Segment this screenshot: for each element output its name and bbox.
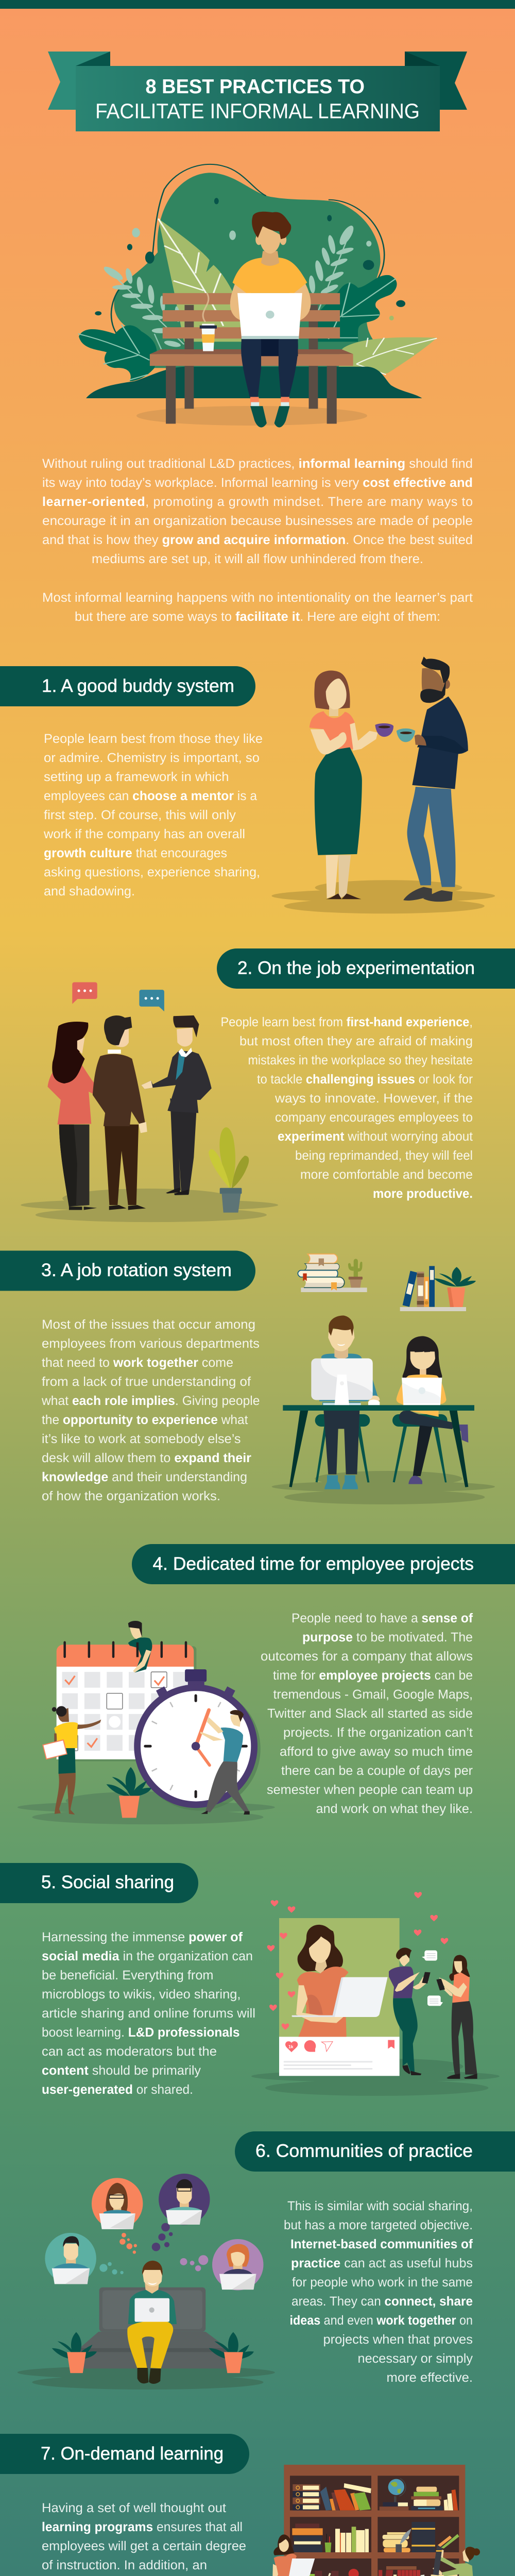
section 7 text: of instruction. In addition, an — [42, 2558, 207, 2572]
calendar — [57, 1642, 196, 1761]
section 4 text — [261, 1611, 473, 1816]
section 2 text: to tackle challenging issues or look for — [257, 1072, 473, 1087]
intro text: its way into today’s workplace. Informal learning is very cost effective and — [42, 476, 473, 490]
section 3 heading — [0, 1251, 255, 1291]
books: shelf row 2 — [292, 2522, 435, 2552]
intro text — [42, 456, 473, 624]
title text: FACILITATE INFORMAL LEARNING — [95, 99, 420, 123]
section 5 text: Harnessing the immense power of — [42, 1930, 243, 1944]
connection dots — [99, 2223, 208, 2275]
illustration: two colleagues with coffee — [271, 657, 495, 913]
intro text: but there are some ways to facilitate it. Here are eight of them: — [75, 609, 440, 624]
section 5 heading — [0, 1863, 198, 1903]
section 3 text: the opportunity to experience what — [42, 1413, 248, 1427]
intro text: learner-oriented, promoting a growth mindset. There are many ways to — [42, 495, 473, 509]
section 1 text — [43, 732, 263, 899]
section 1 heading — [0, 666, 255, 706]
section 1 text: growth culture that encourages — [44, 846, 227, 860]
section 7 text — [41, 2501, 254, 2576]
section 5 heading: 5. Social sharing — [41, 1872, 174, 1892]
section 7 text: employees will get a certain degree — [42, 2539, 246, 2553]
section 1 heading: 1. A good buddy system — [42, 676, 234, 696]
section 4 heading — [132, 1544, 515, 1584]
section 3 text: what each role implies. Giving people — [41, 1394, 260, 1408]
illustration: two people at a desk with shelves — [272, 1254, 495, 1504]
section 6 text: necessary or simply — [357, 2351, 473, 2366]
section 6 heading: 6. Communities of practice — [255, 2141, 473, 2161]
section 4 heading: 4. Dedicated time for employee projects — [152, 1554, 474, 1574]
section 1 text: and shadowing. — [44, 884, 135, 899]
woman with laptop in post — [291, 1925, 388, 2037]
section 3 text: knowledge and their understanding — [42, 1470, 247, 1484]
section 4 text: there can be a couple of days per — [281, 1764, 473, 1778]
section 2 text: more comfortable and become — [300, 1167, 473, 1182]
speech bubble: blue — [139, 990, 164, 1011]
section 5 text: can act as moderators but the — [42, 2044, 217, 2059]
section 6 text: practice can act as useful hubs — [291, 2256, 473, 2270]
section 3 text: employees from various departments — [42, 1336, 260, 1351]
section 1 text: first step. Of course, this will only — [44, 808, 236, 822]
bookshelf — [284, 2465, 465, 2576]
section 2 text: company encourages employees to — [275, 1110, 473, 1125]
section 6 text: more effective. — [386, 2370, 473, 2385]
section 6 text: but has a more targeted objective. — [284, 2218, 473, 2232]
section 3 text: Most of the issues that occur among — [42, 1317, 255, 1332]
section 4 text: People need to have a sense of — [291, 1611, 473, 1625]
section 2 text: being reprimanded, they will feel — [295, 1148, 473, 1163]
section 5 text — [42, 1930, 255, 2097]
woman — [47, 1022, 107, 1210]
section 5 text: content should be primarily — [42, 2063, 201, 2078]
section 1 text: work if the company has an overall — [43, 827, 245, 841]
intro text: encourage it in an organization because businesses are made of people — [42, 514, 473, 528]
section 2 text — [220, 1015, 473, 1201]
post card — [279, 1918, 400, 2076]
man peeking over calendar — [128, 1621, 152, 1672]
post card: 1k — [288, 2044, 294, 2049]
section 2 text: more productive. — [373, 1187, 473, 1201]
section 6 text: for people who work in the same — [292, 2275, 473, 2290]
section 4 text: and work on what they like. — [316, 1802, 473, 1816]
section 2 text: but most often they are afraid of making — [239, 1034, 473, 1048]
section 4 text: outcomes for a company that allows — [261, 1649, 473, 1664]
shelf with books and cactus — [298, 1254, 367, 1292]
avatar: man teal — [45, 2233, 96, 2284]
section 4 text: afford to give away so much time — [280, 1744, 473, 1759]
woman with clipboard — [43, 1706, 101, 1815]
section 2 heading: 2. On the job experimentation — [237, 958, 475, 978]
section 3 text: from a lack of true understanding of — [42, 1375, 251, 1389]
section 6 text — [284, 2199, 473, 2385]
section 1 text: employees can choose a mentor is a — [44, 789, 257, 803]
hero illustration: person on bench with foliage — [78, 164, 437, 428]
top band — [0, 0, 515, 9]
intro text: Most informal learning happens with no intentionality on the learner’s part — [42, 590, 473, 605]
shelf with binders and plant — [400, 1266, 476, 1311]
section 4 text: tremendous - Gmail, Google Maps, — [273, 1687, 473, 1702]
crossed legs — [399, 1411, 468, 1484]
woman with laptop — [271, 2534, 315, 2576]
intro text: mediums are set up, it will all flow unhindered from there. — [92, 552, 423, 566]
section 3 heading: 3. A job rotation system — [41, 1260, 232, 1280]
woman with laptop — [397, 1336, 447, 1417]
chairs — [315, 1414, 448, 1482]
intro text: and that is how they grow and acquire information. Once the best suited — [42, 533, 473, 547]
central person on laptop — [127, 2261, 177, 2384]
floating hearts — [267, 1892, 448, 2030]
illustration: social media post and people — [251, 1892, 500, 2096]
stopwatch — [134, 1669, 261, 1810]
man in brown suit — [93, 1015, 147, 1210]
plants — [52, 2332, 254, 2373]
speech bubbles — [422, 1951, 443, 2006]
section 1 text: or admire. Chemistry is important, so — [44, 751, 260, 765]
speech bubble: red — [72, 982, 97, 1004]
sofa — [79, 2287, 228, 2368]
section 5 text: boost learning. L&D professionals — [42, 2025, 240, 2040]
section 5 text: microblogs to wikis, video sharing, — [42, 1987, 241, 2002]
section 6 heading — [235, 2131, 515, 2172]
section 7 text: learning programs ensures that all — [42, 2520, 243, 2534]
books: shelf row 3 — [295, 2566, 458, 2576]
man with phone — [389, 1947, 431, 2075]
section 2 text: People learn best from first-hand experience, — [220, 1015, 473, 1029]
section 2 text: ways to innovate. However, if the — [274, 1091, 473, 1106]
section 6 text: projects when that proves — [323, 2332, 473, 2347]
man pushing clock hand — [200, 1710, 250, 1815]
section 4 text: time for employee projects can be — [273, 1668, 473, 1683]
section 2 text: experiment without worrying about — [278, 1129, 473, 1144]
desk — [283, 1405, 474, 1487]
section 4 text: purpose to be motivated. The — [302, 1630, 473, 1645]
section 4 text: semester when people can team up — [267, 1783, 473, 1797]
man in dark suit — [141, 1015, 212, 1195]
potted plant — [107, 1767, 151, 1818]
section 7 heading — [0, 2434, 249, 2474]
section 3 text — [41, 1317, 260, 1503]
section 7 text: Having a set of well thought out — [42, 2501, 226, 2515]
section 3 text: of how the organization works. — [42, 1489, 220, 1503]
illustration: three coworkers talking — [21, 982, 278, 1222]
title text — [95, 76, 420, 123]
intro text: Without ruling out traditional L&D practices, informal learning should find — [42, 456, 473, 471]
section 4 text: projects. If the organization can’t — [283, 1725, 473, 1740]
section 1 text: setting up a framework in which — [44, 770, 229, 784]
section 3 text: desk will allow them to expand their — [42, 1451, 251, 1465]
section 2 heading — [217, 948, 515, 989]
section 5 text: be beneficial. Everything from — [42, 1968, 213, 1982]
hero ground shadow — [136, 406, 367, 426]
section 6 text: ideas and even work together on — [289, 2313, 473, 2328]
avatar: woman purple — [212, 2239, 264, 2290]
section 5 text: article sharing and online forums will — [42, 2006, 255, 2021]
potted plant — [209, 1127, 249, 1213]
section 6 text: areas. They can connect, share — [291, 2294, 473, 2309]
section 1 text: asking questions, experience sharing, — [44, 865, 260, 879]
section 3 text: it’s like to work at somebody else’s — [42, 1432, 241, 1446]
illustration: calendar and stopwatch — [18, 1621, 275, 1824]
section 4 text: Twitter and Slack all started as side — [267, 1706, 473, 1721]
section 2 text: mistakes in the workplace so they hesitate — [248, 1053, 473, 1067]
woman with phone — [436, 1955, 477, 2079]
avatar: woman with glasses — [92, 2178, 143, 2229]
section 6 text: This is similar with social sharing, — [287, 2199, 473, 2213]
section 5 text: social media in the organization can — [42, 1949, 253, 1963]
section 1 text: People learn best from those they like — [44, 732, 263, 746]
books: shelf row 1 — [293, 2479, 458, 2511]
man at desktop computer — [311, 1315, 380, 1489]
section 7 heading: 7. On-demand learning — [41, 2444, 224, 2464]
section 5 text: user-generated or shared. — [42, 2082, 193, 2097]
section 6 text: Internet-based communities of — [290, 2237, 473, 2251]
section 3 text: that need to work together come — [42, 1355, 233, 1370]
illustration: community of remote learners — [18, 2174, 275, 2389]
title text: 8 BEST PRACTICES TO — [145, 76, 365, 98]
illustration: bookshelf with readers — [254, 2465, 512, 2576]
avatar: man with glasses — [159, 2174, 210, 2225]
woman reaching for book — [433, 2534, 480, 2576]
title ribbon — [48, 52, 467, 131]
